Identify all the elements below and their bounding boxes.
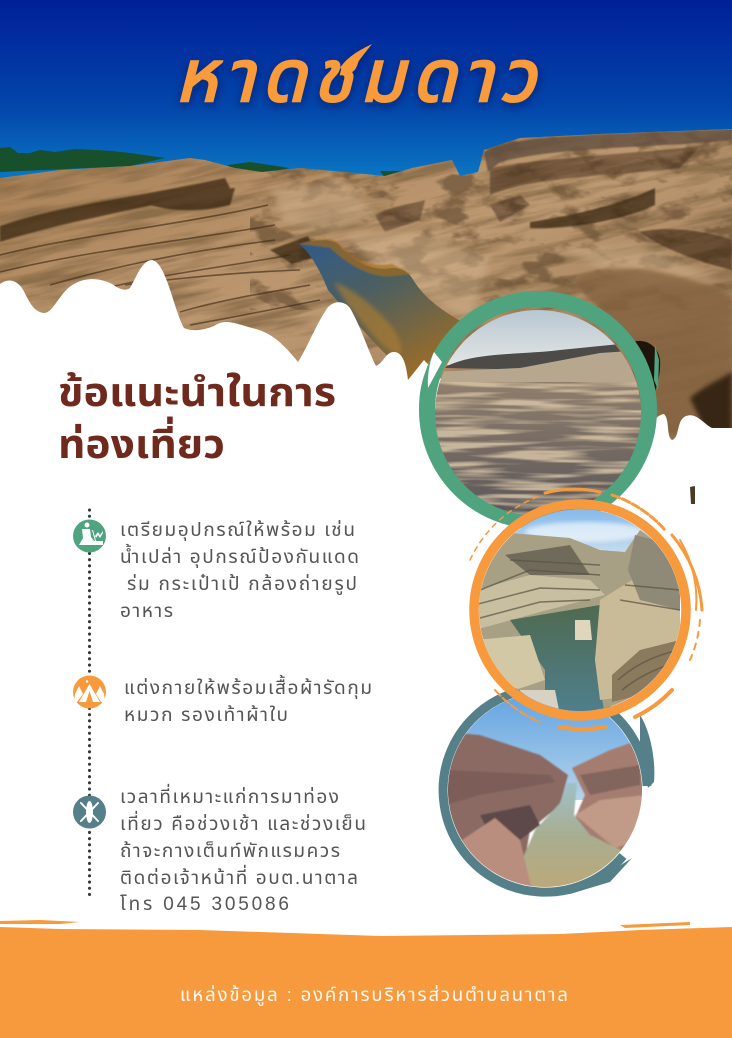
step 1 text bbox=[120, 518, 359, 622]
step 3 text: ติดต่อเจ้าหน้าที่ อบต.นาตาล bbox=[120, 864, 358, 889]
step 2 text bbox=[124, 674, 372, 726]
heading: ท่องเที่ยว bbox=[58, 416, 225, 467]
footer brush strokes bbox=[0, 920, 690, 928]
step 3 text: เที่ยว คือช่วงเช้า และช่วงเย็น bbox=[120, 810, 366, 835]
step 2 text: หมวก รองเท้าผ้าใบ bbox=[124, 703, 288, 726]
step 3 text: โทร 045 305086 bbox=[120, 894, 289, 915]
river water bbox=[299, 240, 462, 384]
footer source text: แหล่งข้อมูล : องค์การบริหารส่วนตำบลนาตาล bbox=[180, 984, 568, 1007]
slanted sandstone strata lines bbox=[0, 205, 320, 325]
icon: hiker bbox=[73, 520, 106, 552]
step 3 text: ถ้าจะกางเต็นท์พักแรมควร bbox=[120, 839, 340, 862]
small rock remnant bbox=[690, 486, 695, 504]
rock shadows bbox=[0, 146, 732, 270]
white torn paper edge bbox=[0, 260, 732, 1038]
photo circle: canyon with river bbox=[443, 688, 654, 895]
distant trees bbox=[0, 147, 412, 178]
step 1 text: น้ำเปล่า อุปกรณ์ป้องกันแดด bbox=[120, 543, 359, 568]
step 1 text: เตรียมอุปกรณ์ให้พร้อม เช่น bbox=[120, 518, 355, 541]
step 3 text: เวลาที่เหมาะแก่การมาท่อง bbox=[120, 783, 339, 808]
step 3 text bbox=[120, 783, 366, 915]
step 2 text: แต่งกายให้พร้อมเสื้อผ้ารัดกุม bbox=[124, 674, 372, 699]
lighter central rocks bbox=[270, 182, 720, 320]
footer band bbox=[0, 927, 732, 1038]
timeline dotted line bbox=[88, 510, 91, 897]
photo: sandstone rocks and water bbox=[0, 129, 732, 440]
large brown boulder right bbox=[572, 268, 732, 440]
sky background bbox=[0, 0, 732, 200]
photo circle: sand dune bbox=[419, 296, 659, 521]
photo circle: layered rocks bbox=[470, 489, 702, 729]
icon: kayak paddles bbox=[73, 796, 106, 828]
upper dark rock ledge bbox=[484, 129, 732, 172]
heading: ข้อแนะนำในการ bbox=[58, 370, 336, 415]
chunky broken rock texture bbox=[250, 130, 732, 310]
step 1 text: ร่ม กระเป๋าเป้ กล้องถ่ายรูป bbox=[127, 572, 357, 596]
title: หาดชมดาว bbox=[175, 37, 538, 117]
step 1 text: อาหาร bbox=[120, 601, 173, 622]
heading bbox=[58, 370, 336, 467]
icon: tent bbox=[73, 676, 106, 708]
